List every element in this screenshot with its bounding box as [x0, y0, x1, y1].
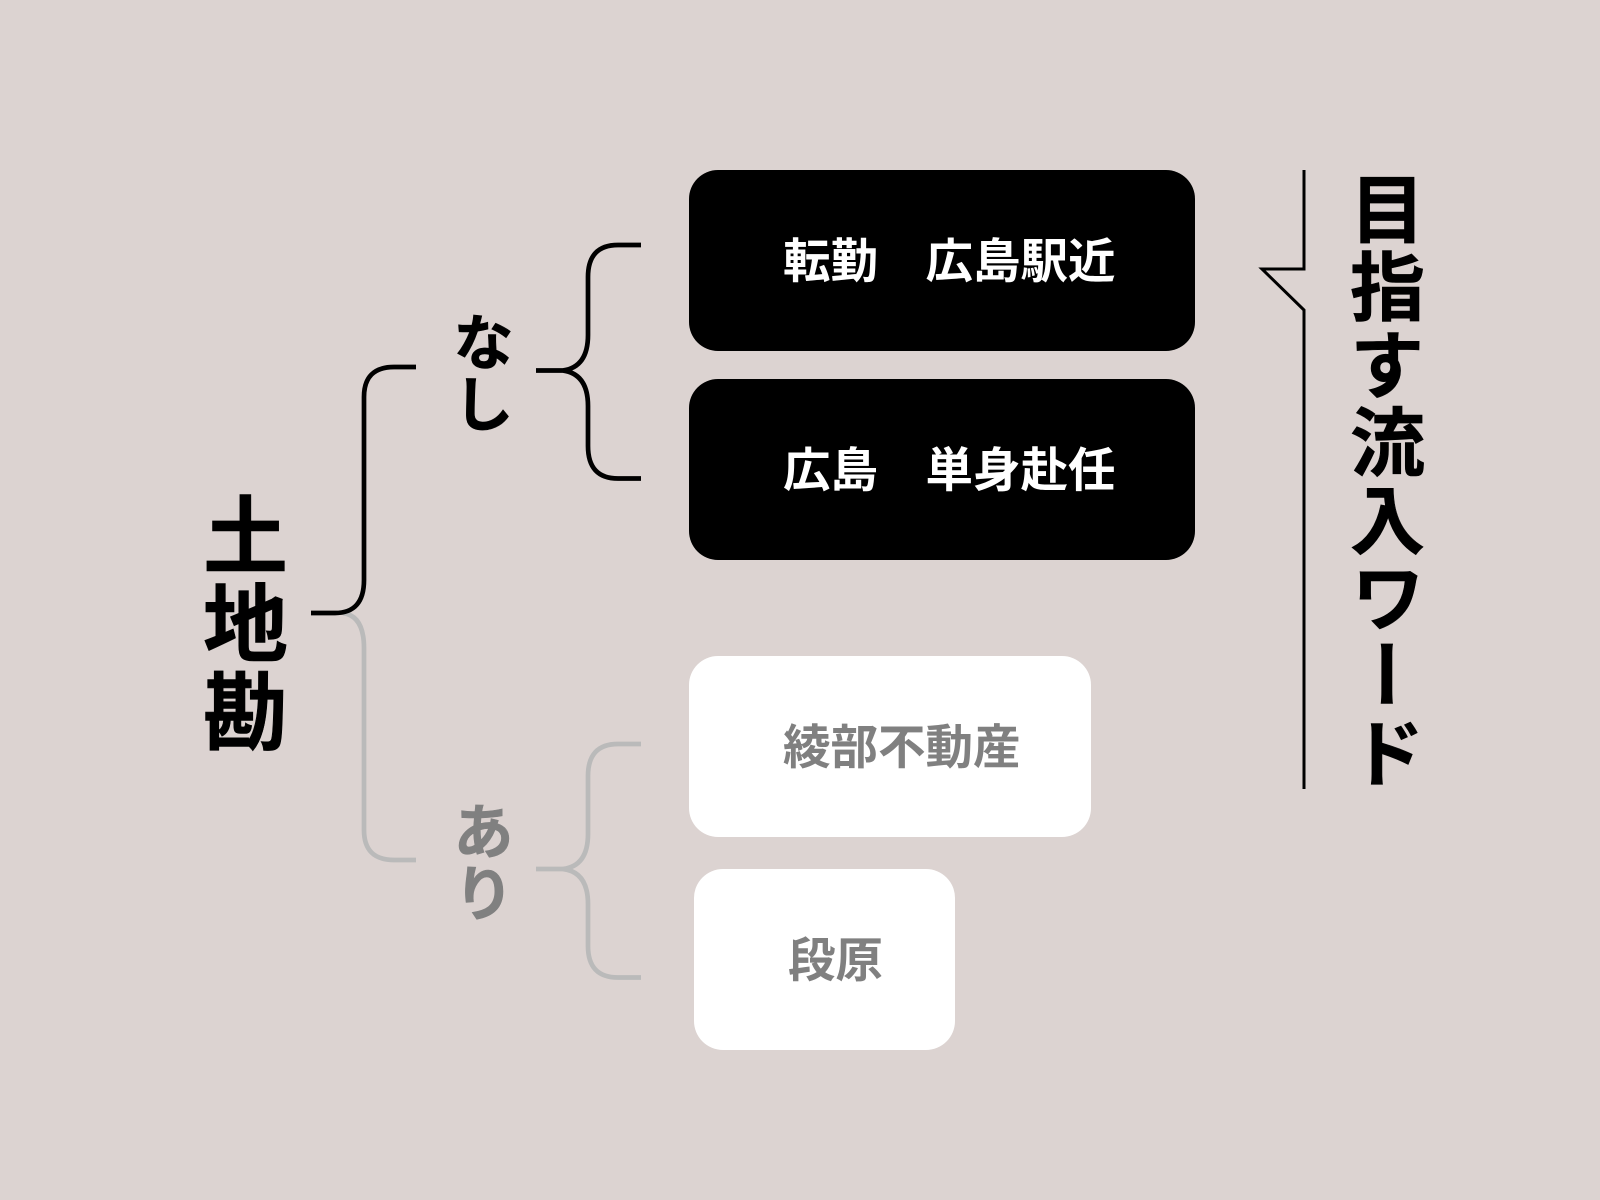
keyword box: 段原 [694, 869, 955, 1050]
bracket: 土地勘 to なし [311, 367, 416, 613]
label: なし: なし [444, 311, 512, 435]
bracket: なし to answers [536, 245, 641, 478]
bracket: あり to answers [536, 744, 641, 978]
heading: 目指す流入ワード: 目指す流入ワード [1339, 171, 1423, 793]
keyword box: 転勤 広島駅近 [689, 170, 1194, 351]
keyword box: 綾部不動産 [689, 656, 1091, 837]
keyword box: 広島 単身赴任 [689, 379, 1194, 560]
label: あり: あり [444, 800, 512, 924]
keyword text: 転勤 広島駅近 [783, 236, 1116, 289]
heading: 土地勘: 土地勘 [190, 492, 285, 757]
keyword text: 広島 単身赴任 [783, 445, 1116, 498]
keyword text: 段原 [788, 935, 883, 988]
callout line: 目指す流入ワード [1262, 170, 1304, 789]
bracket: 土地勘 to あり [343, 613, 416, 860]
keyword text: 綾部不動産 [783, 722, 1020, 775]
